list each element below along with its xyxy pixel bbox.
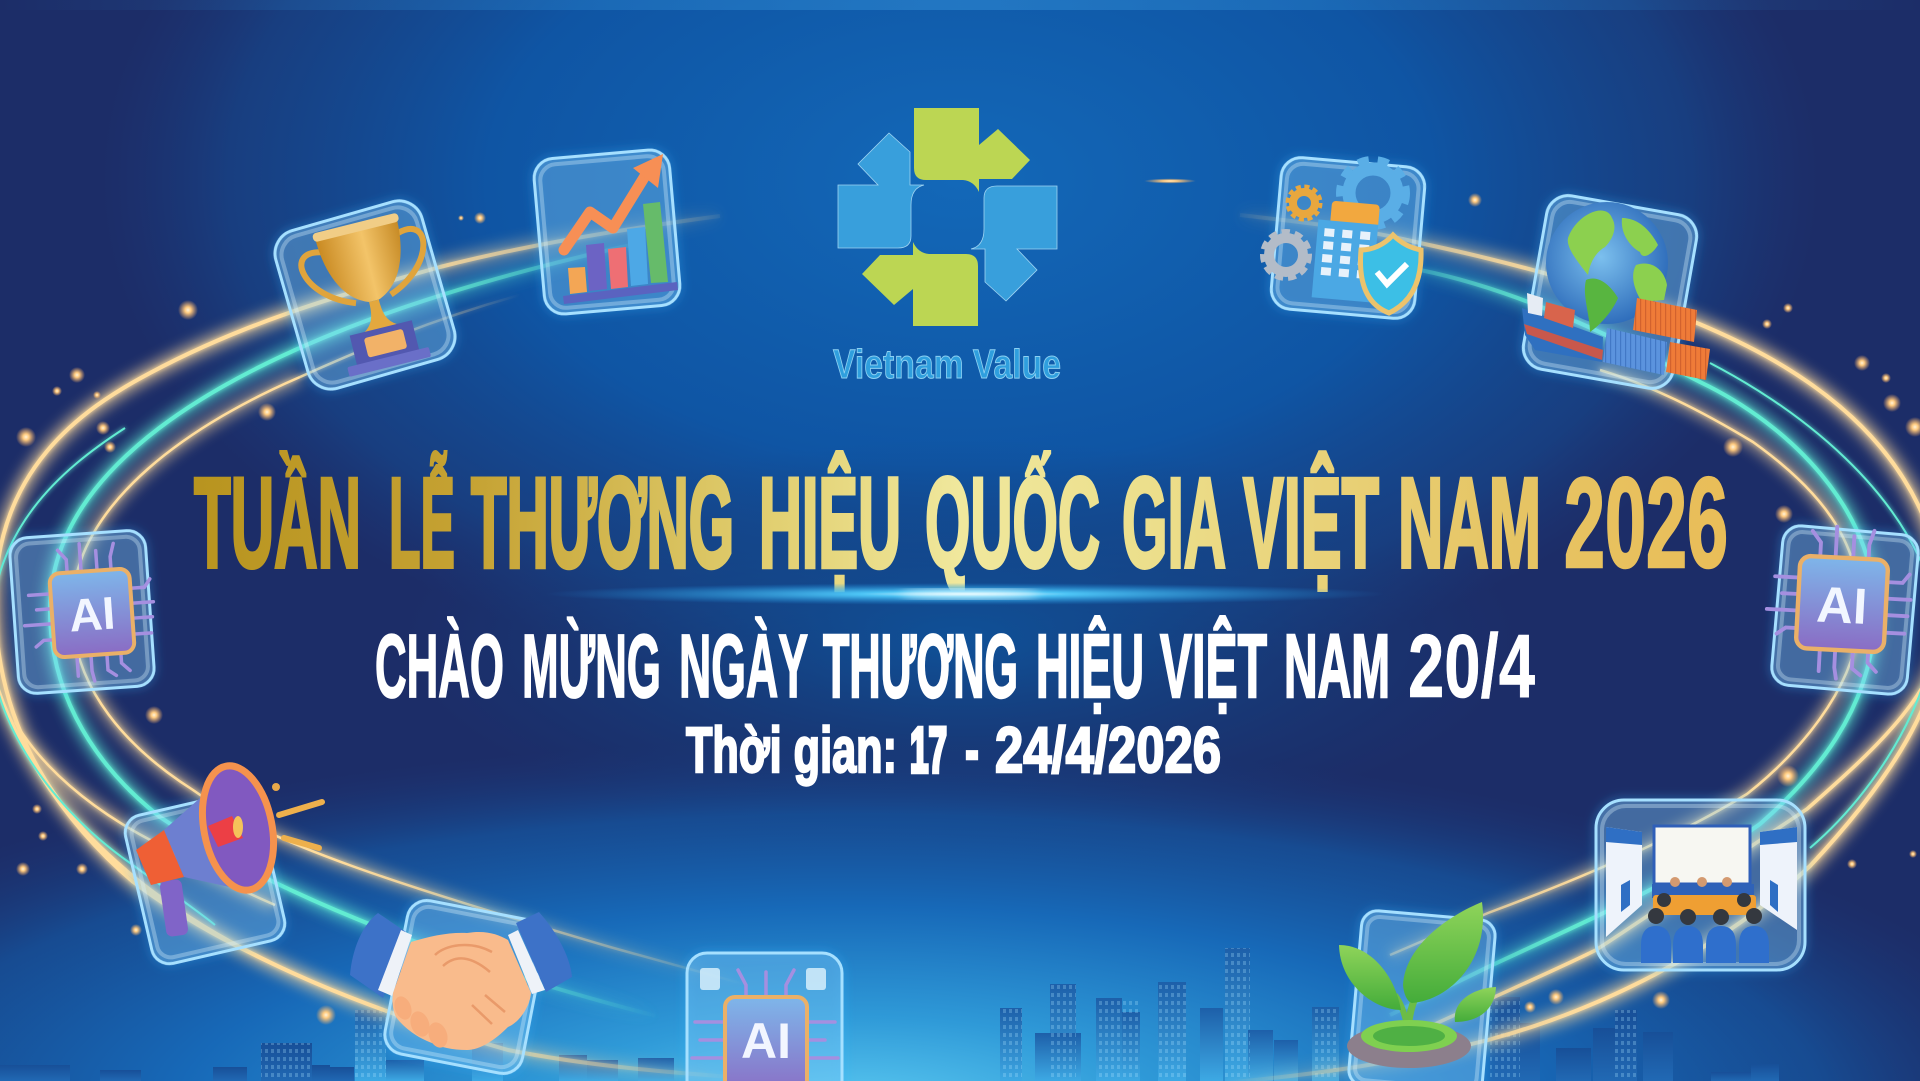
icon: globe xyxy=(1546,202,1668,324)
icon: growth chart tile xyxy=(532,148,682,316)
subtitle: THƯƠNG xyxy=(823,617,1018,717)
logo: green bottom arrow xyxy=(862,242,978,326)
main title: TUẦN xyxy=(194,452,361,595)
icon: audience seats xyxy=(1641,893,1769,963)
icon: trophy tile xyxy=(269,195,461,395)
icon: plant xyxy=(1339,902,1496,1068)
icon: containers xyxy=(1633,298,1697,342)
main title: VIỆT xyxy=(1243,452,1379,595)
icon: ship xyxy=(1522,308,1603,362)
date line: - xyxy=(965,714,979,786)
main title: QUỐC xyxy=(925,452,1100,595)
icon: AI chip tile left xyxy=(9,529,159,695)
subtitle: VIỆT xyxy=(1160,615,1267,717)
icon: projection screen xyxy=(1654,826,1750,884)
icon: gears xyxy=(1263,160,1406,278)
city skyline xyxy=(0,948,1779,1081)
icon: handshake xyxy=(350,912,572,1050)
icon: AI chip tile right: AI xyxy=(1815,575,1869,635)
icon: AI chip tile right xyxy=(1763,523,1920,696)
subtitle: NGÀY xyxy=(679,616,808,717)
icon: factory, gears and shield tile xyxy=(1263,156,1426,320)
main title: HIỆU xyxy=(759,452,901,595)
icon: handshake tile xyxy=(350,897,572,1077)
date line: Thời gian: xyxy=(686,714,897,786)
subtitle xyxy=(375,615,1535,717)
logo: Vietnam Value xyxy=(833,108,1061,387)
main title: THƯƠNG xyxy=(471,452,734,595)
logo: blue left arrow xyxy=(838,133,924,248)
logo: green top arrow xyxy=(914,108,1030,192)
icon: AI chip tile bottom: AI xyxy=(741,1013,791,1069)
icon: conference room tile xyxy=(1596,800,1805,970)
icon: AI chip tile bottom xyxy=(687,953,842,1081)
light divider flare xyxy=(545,583,1385,605)
icon: stage walls xyxy=(1606,827,1797,937)
main title xyxy=(194,452,1728,595)
main title: 2026 xyxy=(1564,452,1728,595)
subtitle: HIỆU xyxy=(1036,615,1144,717)
icon: plant tile xyxy=(1339,902,1496,1081)
logo: blue right arrow xyxy=(971,186,1057,301)
icon: speakers and table xyxy=(1652,877,1756,915)
date line: 17 xyxy=(910,714,947,786)
subtitle: NAM xyxy=(1284,617,1390,717)
subtitle: 20/4 xyxy=(1408,617,1535,717)
icon: AI chip tile left: AI xyxy=(67,586,117,642)
icon: building xyxy=(1312,200,1380,302)
main title: LỄ xyxy=(389,452,455,595)
icon: shield xyxy=(1360,235,1421,313)
icon: megaphone tile xyxy=(122,760,322,967)
icon: megaphone xyxy=(136,760,322,937)
date line xyxy=(686,714,1221,786)
subtitle: MỪNG xyxy=(522,616,661,717)
logo wordmark: Vietnam Value xyxy=(833,341,1061,387)
date line: 24/4/2026 xyxy=(995,714,1221,786)
main title: GIA xyxy=(1122,452,1226,595)
main title: NAM xyxy=(1398,452,1541,595)
icon: globe and cargo ship tile xyxy=(1520,192,1710,392)
subtitle: CHÀO xyxy=(375,616,504,717)
sparkle particles xyxy=(16,193,1920,1025)
header flare beside logo xyxy=(1144,178,1196,184)
